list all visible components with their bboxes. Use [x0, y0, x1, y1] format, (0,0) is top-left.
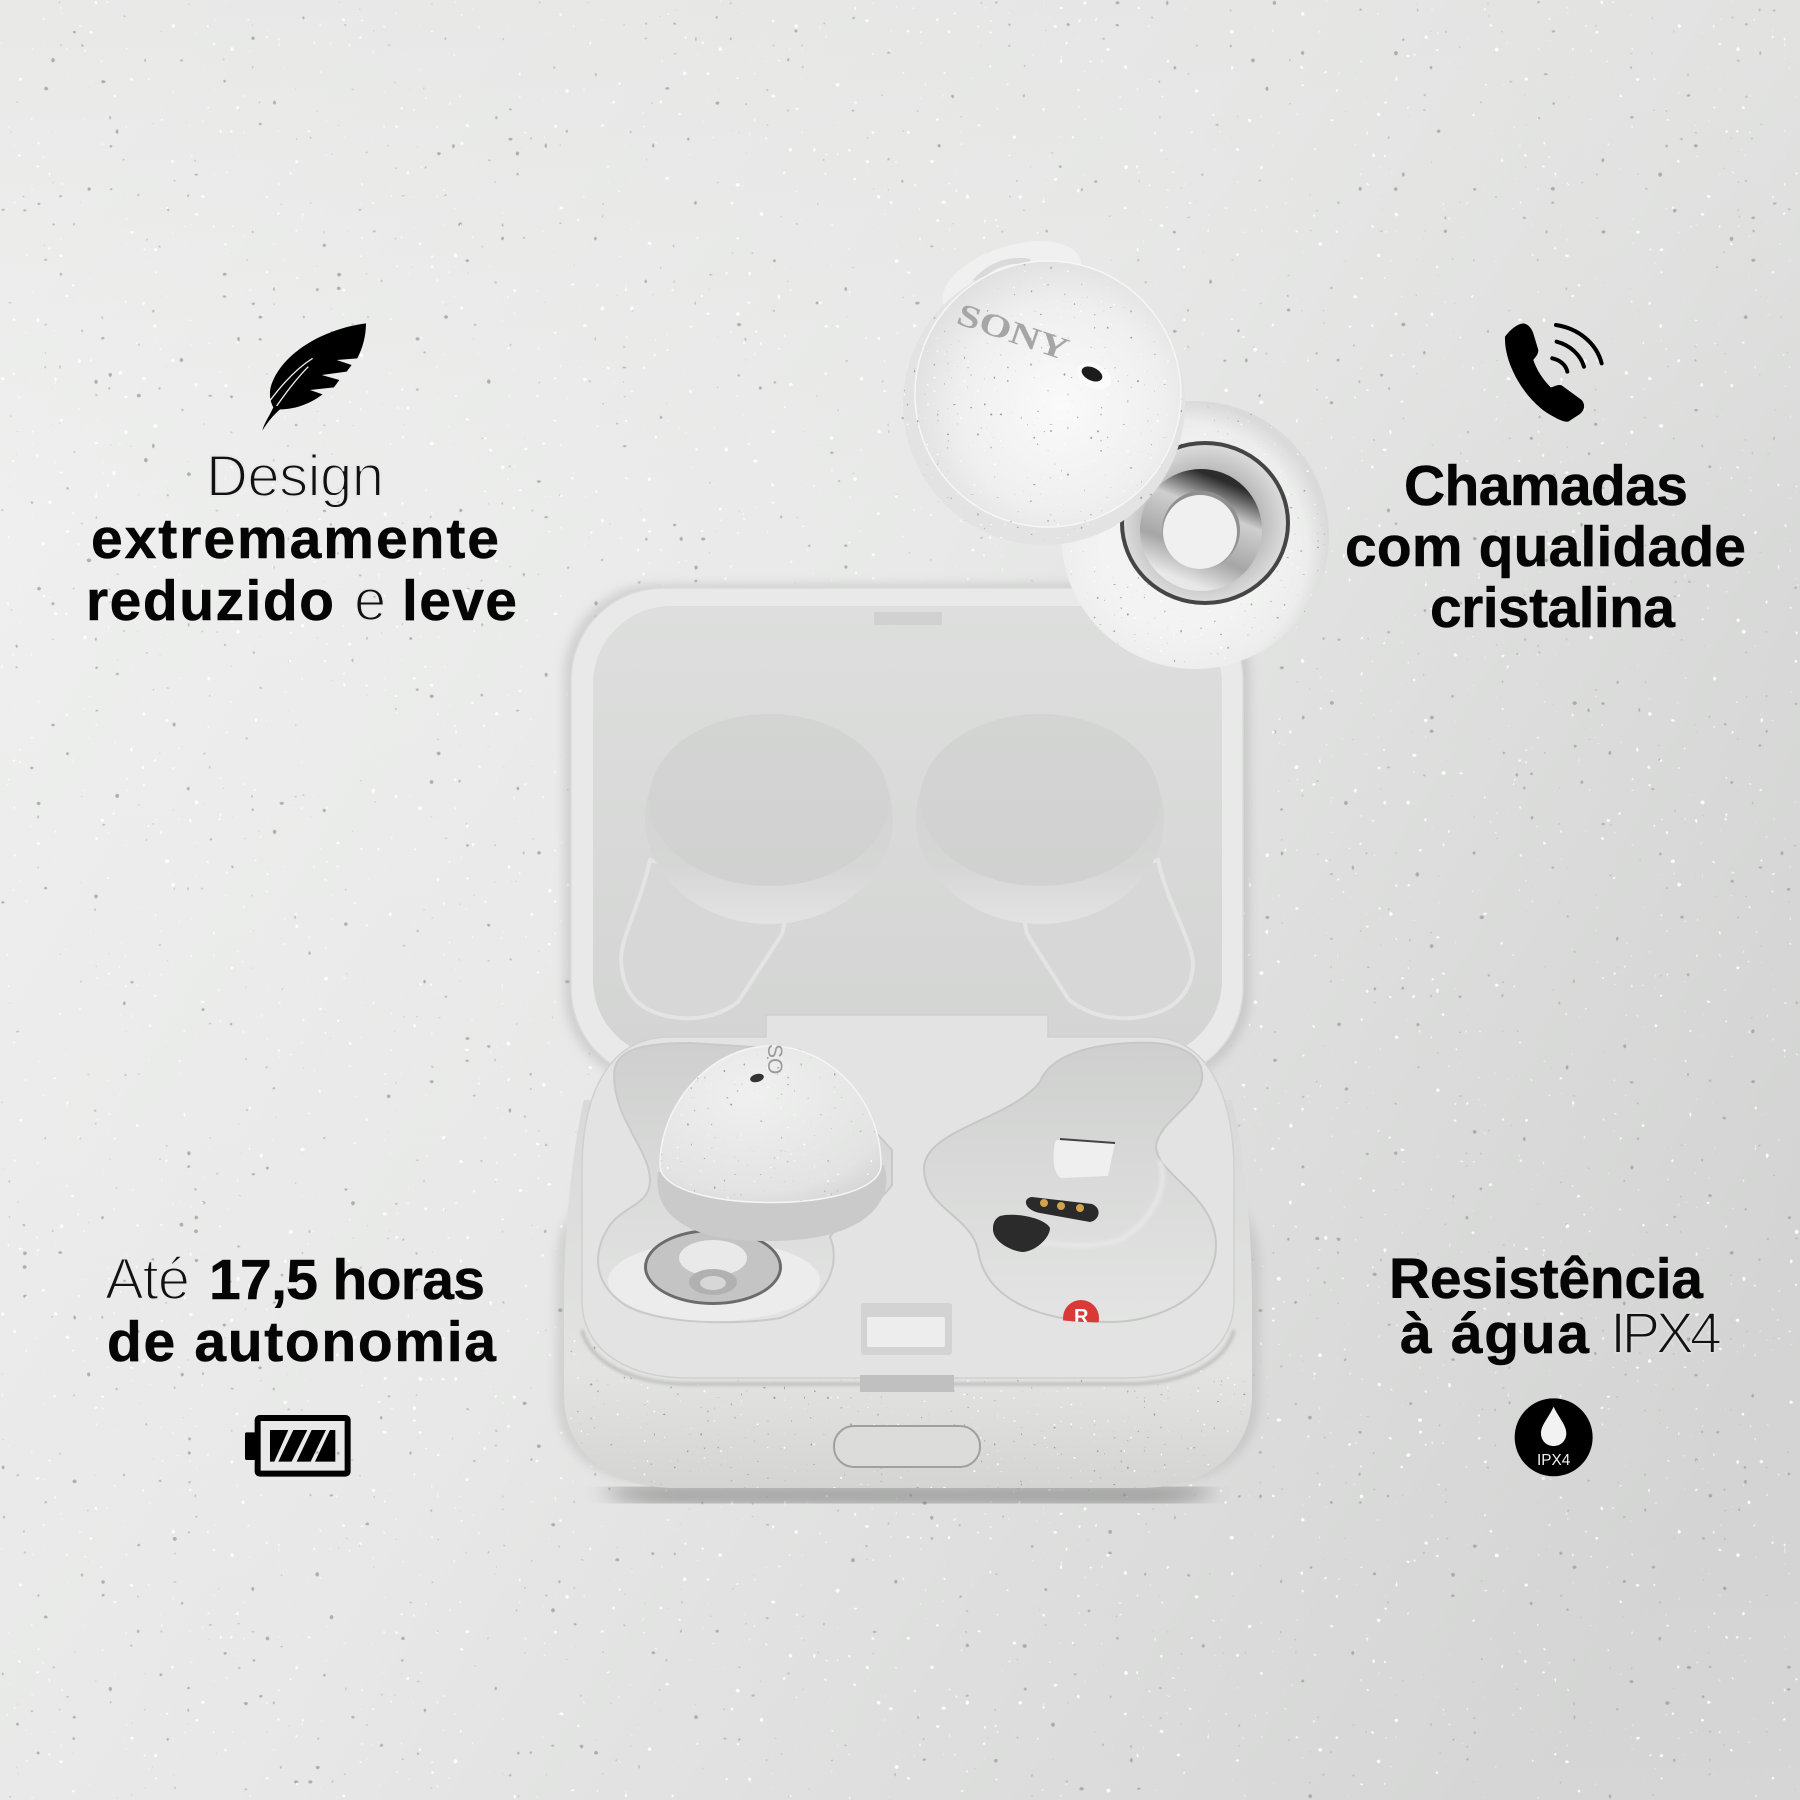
case base [560, 1100, 1260, 1490]
charging block [1054, 1139, 1115, 1178]
floating earbuds [900, 226, 1330, 670]
feature: battery life [105, 1247, 497, 1474]
text: reduzido e leve [86, 568, 517, 633]
latch [861, 1303, 952, 1355]
case shadow [556, 584, 1260, 1502]
earbud fin [932, 226, 1092, 338]
text: Resistência: Resistência [1389, 1247, 1704, 1311]
sensor [993, 1215, 1050, 1252]
text: à água IPX4 [1400, 1301, 1722, 1366]
microphone slit [1073, 358, 1115, 394]
text: reduzido e leve: reduzido [86, 569, 334, 633]
text: Design: Design [206, 444, 384, 509]
text: à água IPX4: à água [1400, 1302, 1590, 1366]
feature: water resistance [1389, 1247, 1722, 1476]
text: Até 17,5 horas: Até [105, 1247, 190, 1312]
inner tray [582, 1015, 1234, 1378]
speaker sphere [900, 260, 1190, 550]
text: com qualidade: com qualidade [1345, 515, 1746, 579]
left well with earbud [598, 1040, 892, 1322]
text: reduzido e leve: e [354, 568, 386, 633]
icon: feather [262, 323, 366, 431]
icon: phone [1505, 323, 1602, 422]
text: extremamente: extremamente [91, 507, 499, 571]
lid recess left [621, 714, 893, 1018]
icon: water drop badge [1515, 1398, 1593, 1476]
text: Chamadas: Chamadas [1404, 454, 1688, 518]
lower earbud ring [608, 1229, 820, 1321]
right side marker: R [1074, 1306, 1089, 1328]
text: reduzido e leve: leve [402, 569, 517, 633]
lid recess right [916, 714, 1193, 1018]
hinge strip [860, 1375, 954, 1392]
text: cristalina: cristalina [1430, 576, 1676, 640]
icon: water drop badge: IPX4 [1537, 1452, 1571, 1469]
right side marker [1063, 1300, 1099, 1322]
open lid [571, 588, 1243, 1080]
open earbud [1060, 400, 1330, 670]
feature: crystal clear calls [1345, 323, 1746, 640]
upper earbud dome [655, 1040, 886, 1241]
gold contact pins [1026, 1197, 1099, 1222]
sony logo: SONY [952, 297, 1073, 368]
icon: battery [245, 1418, 348, 1474]
text: Até 17,5 horas: 17,5 horas [209, 1248, 485, 1312]
text: de autonomia: de autonomia [107, 1310, 497, 1374]
feature: lightweight design [86, 323, 517, 633]
right empty well [924, 1043, 1216, 1336]
earbud charging case [556, 584, 1260, 1502]
case button [834, 1426, 980, 1467]
text: à água IPX4: IPX4 [1610, 1301, 1722, 1366]
upper earbud dome: SO [763, 1044, 786, 1074]
